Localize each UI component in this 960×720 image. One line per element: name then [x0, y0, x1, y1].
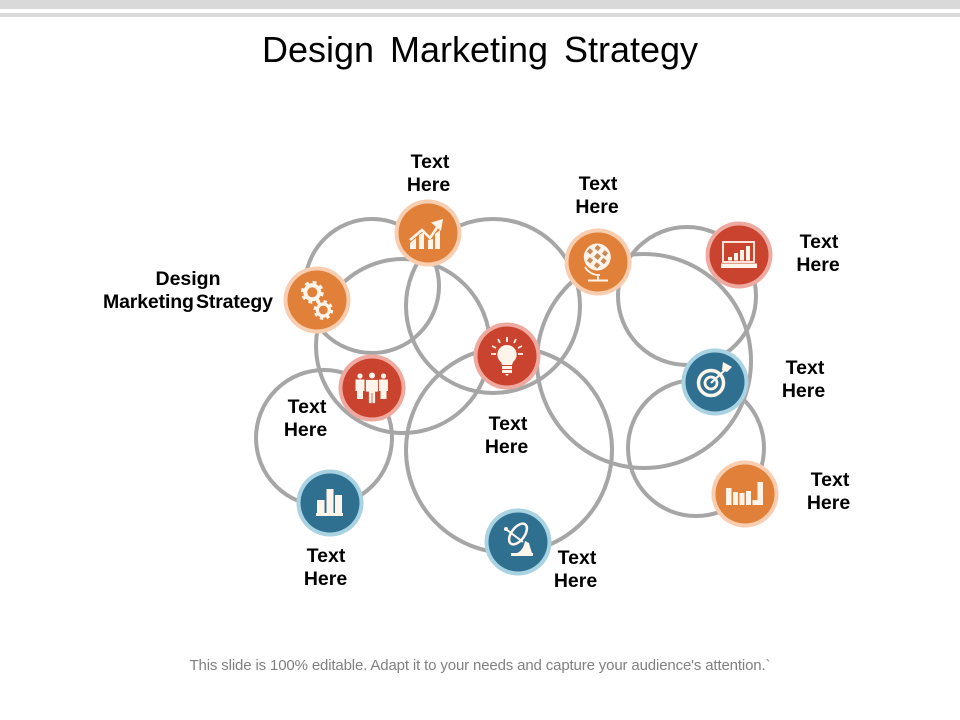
label: dish [554, 547, 597, 592]
node: growth chart icon [394, 200, 462, 266]
node: target icon [682, 348, 748, 416]
label: design marketing strategy [103, 268, 273, 313]
label: column chart: Here [304, 568, 347, 590]
label: laptop: Here [796, 254, 840, 276]
title: Design Marketing Strategy [262, 29, 698, 70]
label: column chart [304, 545, 347, 590]
label: target: Text [786, 357, 825, 379]
node: satellite dish icon [484, 508, 552, 576]
label: column chart: Text [307, 545, 346, 567]
footer note: This slide is 100% editable. Adapt it to your needs and capture your audience's attention.` [190, 657, 770, 674]
label: bar chart: Text [811, 469, 850, 491]
label: bulb: Here [485, 436, 528, 458]
interlocking circles [256, 219, 764, 553]
label: chart [407, 151, 450, 196]
node: simple column chart icon [296, 470, 364, 536]
label: chart: Here [407, 174, 450, 196]
label: globe: Here [575, 196, 619, 218]
label: bulb [485, 413, 528, 458]
node: laptop icon [706, 222, 772, 288]
label: target: Here [782, 380, 825, 402]
label: target [782, 357, 825, 402]
label: people: Text [288, 396, 327, 418]
label: bar chart [807, 469, 850, 514]
label: laptop: Text [800, 231, 839, 253]
label: people: Here [284, 419, 327, 441]
label: design marketing strategy: Marketing Strategy [103, 291, 273, 313]
label: dish: Text [558, 547, 597, 569]
node: people icon [338, 354, 406, 422]
label: bar chart: Here [807, 492, 850, 514]
label: chart: Text [411, 151, 450, 173]
node: bar chart icon [712, 460, 778, 528]
label: laptop [796, 231, 840, 276]
label: dish: Here [554, 570, 597, 592]
label: bulb: Text [489, 413, 528, 435]
node: gears icon [284, 266, 350, 334]
node: globe icon [564, 228, 632, 296]
label: globe: Text [579, 173, 618, 195]
label: people [284, 396, 327, 441]
label: design marketing strategy: Design [155, 268, 221, 290]
node: light bulb icon [474, 322, 540, 390]
label: globe [575, 173, 619, 218]
